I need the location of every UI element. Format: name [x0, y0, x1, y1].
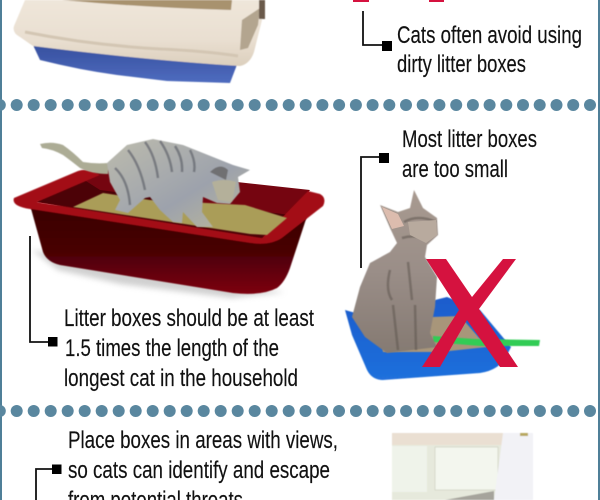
callout: dirty litter boxes: dirty litter boxes: [397, 51, 526, 78]
door: [494, 433, 533, 500]
callout text: Litter boxes should be at least: [64, 305, 314, 332]
beige hood rim: [14, 0, 262, 66]
kitten body: [352, 190, 438, 353]
cat face: [212, 180, 236, 202]
callout: boxes too small: are too small: [402, 156, 508, 183]
kitten markings: [388, 218, 436, 350]
callout: boxes too small: [361, 126, 537, 268]
cat ear: [210, 166, 228, 180]
tray rim: [14, 170, 324, 244]
red marks cropped at top: [353, 0, 444, 2]
page border left: [0, 0, 2, 500]
leader line: [361, 157, 381, 268]
image: kitten in small blue litter box: [345, 190, 540, 380]
tray back wall: [78, 168, 310, 215]
leader square: [379, 153, 389, 163]
cat tail: [40, 143, 108, 174]
callout: dirty litter boxes: [363, 11, 582, 78]
cat body: [107, 139, 250, 227]
image: white cabinets photo: [392, 433, 533, 500]
image: covered litter box with blue base: [14, 0, 265, 83]
leader square: [48, 337, 58, 346]
icon: red X: [422, 259, 518, 367]
blue base: [33, 45, 238, 83]
litter inside: [62, 0, 232, 10]
tray shadow: [32, 250, 285, 298]
callout: litter box length: 1.5 times the length of the: [65, 335, 279, 362]
dotted divider top: [0, 99, 596, 111]
leader line: [30, 236, 50, 342]
leader square: [52, 464, 62, 474]
callout text: Most litter boxes: [402, 126, 537, 153]
callout: litter box length: longest cat in the household: [64, 365, 298, 392]
side shading: [240, 8, 260, 50]
image: cat in red litter box: [14, 139, 324, 298]
dark gap below cabinet: [445, 491, 494, 500]
callout text: Place boxes in areas with views,: [68, 427, 338, 454]
litter in tray: [380, 316, 487, 352]
dotted divider bottom: [0, 405, 596, 417]
cabinet panel left: [392, 446, 427, 492]
page border right: [598, 0, 600, 500]
rim crease: [25, 32, 238, 56]
leader line: [36, 469, 54, 500]
cat: [40, 139, 250, 227]
handle: [259, 0, 265, 19]
green scoop: [433, 336, 540, 346]
callout: litter box length: [30, 236, 314, 392]
callout: places with views: [36, 427, 338, 500]
leader line: [363, 11, 384, 45]
red tray body: [30, 205, 309, 294]
leader square: [382, 41, 392, 51]
kitten ear: [382, 207, 404, 229]
cabinet background: [392, 445, 533, 500]
cabinet panel right: [435, 447, 498, 490]
tray inner: [36, 176, 306, 238]
blue tray: [345, 297, 511, 380]
cabinet top band: [392, 433, 533, 445]
cat stripes: [115, 141, 194, 205]
callout: places with views: so cats can identify and escape: [68, 457, 330, 484]
litter: [73, 193, 287, 235]
kitten face: [408, 220, 437, 243]
hinge: [520, 433, 528, 436]
